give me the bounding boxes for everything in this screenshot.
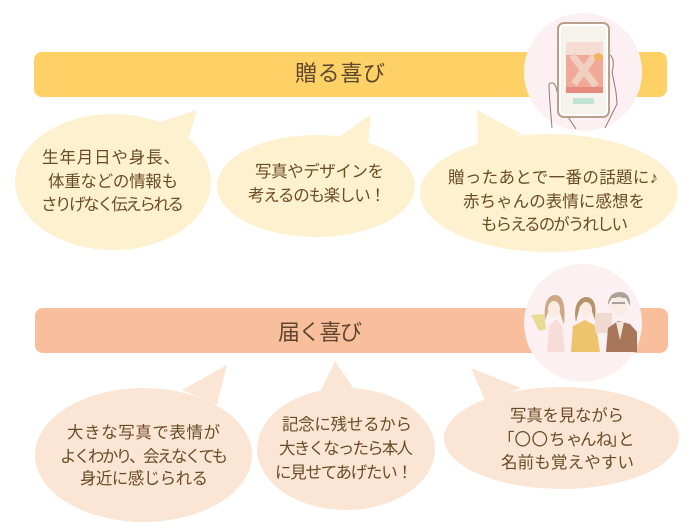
speech bubble: 贈ったあとで: 赤ちゃんの表情に感想を: [463, 192, 645, 211]
speech bubble: 記念に残せる: 記念に残せるから: [282, 415, 412, 434]
speech bubble: 大きな写真: 大きな写真で表情が: [67, 423, 220, 442]
heading bar: 贈る喜び: 贈る喜び: [295, 61, 385, 86]
speech bubble: 生年月日: 生年月日や身長、: [42, 148, 180, 167]
speech bubble: 写真やデザイン: 考えるのも楽しい！: [248, 186, 386, 205]
speech bubble: 大きな写真: [35, 365, 252, 522]
icon: phone held in hands: [524, 13, 642, 131]
speech bubble: 写真を見ながら: [444, 368, 679, 489]
speech bubble: 大きな写真: 身近に感じられる: [80, 469, 208, 488]
heading bar: 贈る喜び: [34, 52, 667, 97]
speech bubble: 写真を見ながら: 名前も覚えやすい: [501, 453, 634, 472]
speech bubble: 大きな写真: よくわかり、会えなくても: [60, 447, 228, 466]
speech bubble: 写真を見ながら: 写真を見ながら: [510, 406, 624, 425]
heading bar: 届く喜び: 届く喜び: [278, 320, 362, 345]
speech bubble: 贈ったあとで: もらえるのがうれしい: [481, 215, 628, 234]
speech bubble: 生年月日: さりげなく伝えられる: [41, 195, 184, 214]
heading bar: 届く喜び: [35, 308, 668, 353]
speech bubble: 贈ったあとで: 贈ったあとで一番の話題に♪: [448, 168, 658, 187]
speech bubble: 贈ったあとで: [420, 110, 678, 252]
speech bubble: 写真やデザイン: [217, 114, 415, 237]
speech bubble: 記念に残せる: 大きくなったら本人: [279, 439, 414, 458]
speech bubble: 記念に残せる: [257, 361, 435, 510]
speech bubble: 生年月日: [15, 110, 211, 250]
icon: three family members looking at photos: [524, 264, 642, 382]
speech bubble: 写真を見ながら: 「〇〇ちゃんね」と: [498, 430, 634, 449]
speech bubble: 写真やデザイン: 写真やデザインを: [255, 161, 384, 181]
speech bubble: 記念に残せる: に見せてあげたい！: [275, 463, 413, 482]
speech bubble: 生年月日: 体重などの情報も: [48, 172, 178, 191]
